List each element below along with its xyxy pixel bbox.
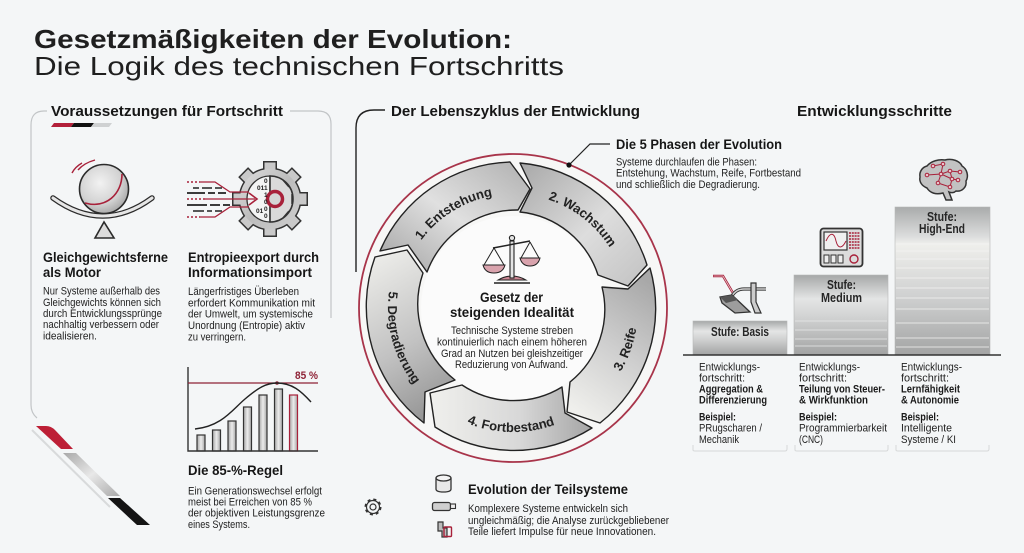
- column text: High-End: Entwicklungs-: [901, 362, 962, 374]
- column text: Basis: Aggregation &: [699, 384, 763, 396]
- column text: Medium: (CNC): [799, 434, 823, 446]
- chart: 85 percent rule: 85 %: [295, 370, 318, 382]
- step: High-End: Stufe:: [927, 210, 957, 224]
- callout: Die 5 Phasen der Evolution: [566, 137, 801, 191]
- segment: Wachstum: 2. Wachstum: [548, 192, 614, 247]
- text: Gleichgewichtsferne: [43, 250, 168, 342]
- column text: High-End: Beispiel:: [901, 412, 939, 424]
- cycle diagram: [358, 153, 668, 463]
- icon: pipe joint: [438, 522, 452, 537]
- text: 85 percent rule: Die 85-%-Regel: [188, 462, 283, 478]
- panel: Voraussetzungen für Fortschritt: [31, 103, 331, 531]
- text: Entropieexport: Längerfristiges Überleben: [188, 286, 299, 298]
- text: Gleichgewichtsferne: als Motor: [43, 265, 102, 280]
- icon: gear with data streams: 1: [264, 185, 268, 192]
- text: Entropieexport: Unordnung (Entropie) aktiv: [188, 320, 305, 332]
- text: Entropieexport: Entropieexport durch: [188, 250, 319, 265]
- step: Basis: [693, 321, 787, 355]
- icon: plough: [713, 276, 766, 313]
- column brackets: [693, 445, 989, 451]
- column text: Medium: fortschritt:: [799, 372, 847, 384]
- center text: Gesetz der steigenden Idealität: steigenden Idealität: [450, 304, 574, 320]
- icon: gear with data streams: 01: [256, 208, 264, 215]
- step: Basis: Stufe: Basis: [711, 325, 769, 339]
- text: Entropieexport: der Umwelt, um systemische: [188, 308, 313, 320]
- column text: Basis: PRugscharen /: [699, 422, 763, 434]
- column text: Medium: Entwicklungs-: [799, 362, 860, 374]
- column text: Medium: Teilung von Steuer-: [799, 384, 885, 396]
- text: 85 percent rule: [188, 462, 325, 531]
- text: Evolution der Teilsysteme: ungleichmäßig; die Analyse zurückgebliebener: [468, 515, 669, 527]
- step: Medium: Medium: [821, 291, 862, 305]
- text: Gleichgewichtsferne: Gleichgewichts können sich: [43, 297, 161, 309]
- center text: Gesetz der steigenden Idealität: [437, 289, 587, 371]
- text: Gleichgewichtsferne: Gleichgewichtsferne: [43, 250, 168, 265]
- text: Gleichgewichtsferne: nachhaltig verbessern oder: [43, 319, 159, 331]
- segment: Reife: 3. Reife: [614, 328, 636, 371]
- panel outline: [31, 111, 331, 418]
- icon: gear with data streams: 0: [264, 199, 268, 206]
- column text: High-End: Systeme / KI: [901, 434, 956, 446]
- segment: Entstehung: 1. Entstehung: [416, 189, 492, 240]
- step: High-End: [895, 207, 990, 355]
- segment: Degradierung: 5. Degradierung: [386, 292, 419, 384]
- center text: Gesetz der steigenden Idealität: Reduzierung von Aufwand.: [455, 359, 568, 371]
- stair chart: Entwicklungsschritte: [683, 159, 1001, 451]
- column text: Basis: Beispiel:: [699, 412, 736, 424]
- callout: Die 5 Phasen der Evolution: Entstehung, Wachstum, Reife, Fortbestand: [616, 168, 801, 180]
- center text: Gesetz der steigenden Idealität: kontinuierlich nach einem höheren: [437, 336, 587, 348]
- column text: Medium: Beispiel:: [799, 412, 837, 424]
- column text: Medium: & Wirkfunktion: [799, 394, 868, 406]
- column text: High-End: [901, 362, 962, 446]
- icon: piston part: [432, 502, 456, 510]
- icon: gear with data streams: 1: [264, 192, 268, 199]
- step: Medium: Stufe:: [827, 278, 856, 292]
- icon: small gear: [366, 500, 380, 514]
- icon: cylinder: [436, 475, 451, 492]
- text: Evolution der Teilsysteme: Teile liefert Impulse für neue Innovationen.: [468, 526, 656, 538]
- text: 85 percent rule: der objektiven Leistungsgrenze: [188, 508, 325, 520]
- column text: Medium: Programmierbarkeit: [799, 422, 888, 434]
- column text: Basis: fortschritt:: [699, 372, 745, 384]
- text: Gleichgewichtsferne: idealisieren.: [43, 330, 97, 342]
- text: Entropieexport: zu verringern.: [188, 332, 246, 344]
- icon: gear with data streams: 0: [264, 178, 268, 185]
- center text: Gesetz der steigenden Idealität: Gesetz der: [480, 289, 543, 305]
- section heading: Entwicklungsschritte: Entwicklungsschritte: [797, 103, 952, 120]
- segment: Reife: [566, 267, 656, 424]
- column text: Basis: Entwicklungs-: [699, 362, 760, 374]
- text: Entropieexport: Informationsimport: [188, 265, 313, 280]
- text: Evolution der Teilsysteme: Evolution der Teilsysteme: [468, 482, 628, 497]
- icon: gear with data streams: 0: [264, 206, 268, 213]
- text: 85 percent rule: Ein Generationswechsel erfolgt: [188, 486, 323, 498]
- column text: Medium: [799, 362, 888, 446]
- column text: Basis: Mechanik: [699, 434, 739, 446]
- center text: Gesetz der steigenden Idealität: Technische Systeme streben: [451, 325, 573, 337]
- segment: Wachstum: [519, 162, 648, 287]
- icon: gear with data streams: 01: [257, 185, 265, 192]
- outer ring: [359, 154, 667, 462]
- chart: 85 percent rule: [188, 367, 318, 451]
- step: High-End: High-End: [919, 222, 965, 236]
- text: Evolution der Teilsysteme: [468, 482, 669, 538]
- text: Evolution der Teilsysteme: Komplexere Systeme entwickeln sich: [468, 503, 628, 515]
- center text: Gesetz der steigenden Idealität: Grad an Nutzen bei gleishzeitiger: [441, 348, 583, 360]
- title: [34, 24, 564, 81]
- icon: scales: [483, 235, 540, 283]
- icon: control panel: [820, 228, 862, 266]
- heading accent stripe: [51, 123, 112, 127]
- column text: High-End: Intelligente: [901, 422, 952, 434]
- inner white disc: [421, 216, 605, 400]
- icon: brain: [920, 159, 967, 200]
- column text: Basis: [699, 362, 767, 446]
- segment: Degradierung: [366, 249, 456, 424]
- title: Die Logik des technischen Fortschritts: [34, 51, 564, 81]
- text: Gleichgewichtsferne: durch Entwicklungssprünge: [43, 308, 162, 320]
- text: Gleichgewichtsferne: Nur Systeme außerhalb des: [43, 286, 160, 298]
- segment: Entstehung: [379, 161, 531, 273]
- column text: High-End: Lernfähigkeit: [901, 384, 960, 396]
- section: Lebenszyklus heading and bracket: [356, 103, 640, 272]
- text: 85 percent rule: meist bei Erreichen von 85 %: [188, 496, 312, 508]
- icon: ball on cradle: [53, 160, 152, 238]
- column text: High-End: & Autonomie: [901, 394, 959, 406]
- panel heading: Voraussetzungen für Fortschritt: [51, 103, 283, 120]
- title: Gesetzmäßigkeiten der Evolution:: [34, 24, 512, 54]
- segment: Fortbestand: [429, 384, 593, 452]
- icon: gear with data streams: 0: [264, 213, 268, 220]
- callout: Die 5 Phasen der Evolution: und schließlich die Degradierung.: [616, 179, 760, 191]
- baseline: [683, 354, 1001, 356]
- column text: Basis: Differenzierung: [699, 394, 767, 406]
- icon: gear with data streams: [187, 161, 308, 237]
- segment: Fortbestand: 4. Fortbestand: [468, 416, 554, 432]
- text: Entropieexport: [188, 250, 319, 344]
- section: Lebenszyklus heading and bracket: Der Lebenszyklus der Entwicklung: [391, 103, 640, 120]
- text: Entropieexport: erfordert Kommunikation mit: [188, 298, 316, 310]
- callout: Die 5 Phasen der Evolution: Die 5 Phasen der Evolution: [616, 137, 782, 152]
- callout: Die 5 Phasen der Evolution: Systeme durchlaufen die Phasen:: [616, 156, 757, 168]
- step: Medium: [794, 275, 888, 355]
- decorative diagonal band: [32, 426, 150, 525]
- text: 85 percent rule: eines Systems.: [188, 519, 250, 531]
- column text: High-End: fortschritt:: [901, 372, 949, 384]
